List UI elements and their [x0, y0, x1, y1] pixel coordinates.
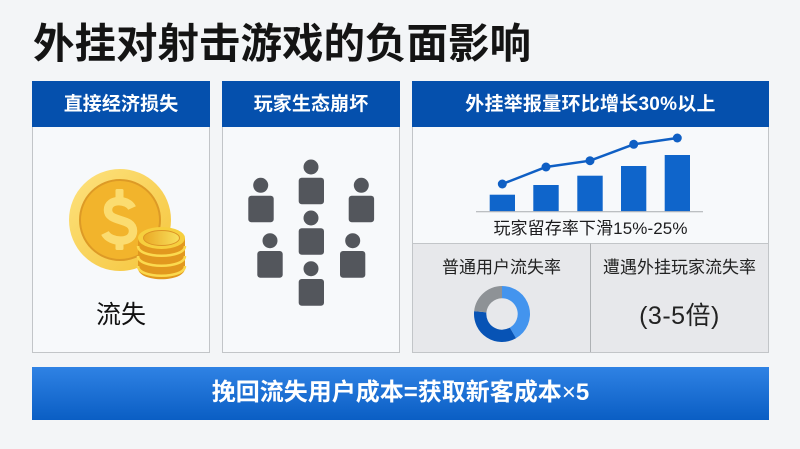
label: loss: 流失: [96, 301, 146, 329]
heading: direct economic loss: 直接经济损失: [64, 94, 178, 115]
caption: retention drop: 玩家留存率下滑15%-25%: [493, 219, 688, 238]
icon: gold coins: [69, 169, 186, 280]
sub-panel: normal user churn: [413, 243, 591, 352]
label: normal user churn: 普通用户流失率: [442, 258, 561, 277]
chart: bars with trend line: [476, 134, 703, 212]
label: cheated player churn: 遭遇外挂玩家流失率: [603, 258, 756, 277]
heading: direct economic loss: [32, 81, 210, 127]
banner: retention cost formula: [32, 367, 769, 420]
panel: player ecosystem collapse: [222, 81, 400, 353]
title: 外挂对射击游戏的负面影响: [33, 20, 531, 67]
panel: direct economic loss: [32, 81, 210, 353]
icon: group of players: [248, 160, 374, 306]
heading: cheat reports growth: [412, 81, 769, 127]
heading: cheat reports growth: 外挂举报量环比增长30%以上: [465, 94, 716, 115]
panel: cheat reports growth: [412, 81, 769, 353]
chart: churn donut: [474, 286, 530, 342]
heading: player ecosystem collapse: [222, 81, 400, 127]
banner: retention cost formula: 挽回流失用户成本=获取新客成本×5: [212, 379, 589, 406]
sub-panel: cheated player churn: [591, 243, 768, 352]
heading: player ecosystem collapse: 玩家生态崩坏: [254, 94, 368, 115]
value: 3-5 times: (3-5倍): [639, 302, 720, 330]
